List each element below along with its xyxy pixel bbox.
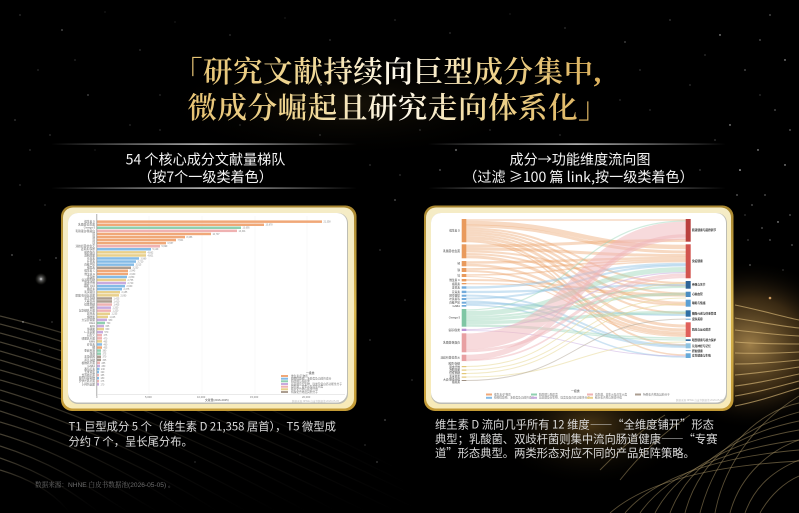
bar values: 10,797 (212, 234, 220, 236)
bar labels: 葡萄籽提取物 (79, 376, 95, 380)
source labels: 维生素 D (449, 228, 460, 232)
heading: right chart (428, 143, 726, 189)
bar values: 6,557 (168, 243, 174, 245)
source labels: 白藜芦醇 (449, 300, 460, 304)
bar labels: 低聚果糖 (84, 302, 95, 306)
bar labels: 镁 (92, 241, 95, 245)
legend: 一级类 (571, 388, 580, 393)
bar labels: 藻油 (90, 352, 95, 356)
bar labels: 菊粉 (90, 306, 95, 310)
source labels: 乳酸菌/益生菌 (443, 249, 460, 253)
bar values: 3,515 (136, 265, 142, 267)
flows: amino acids (466, 272, 686, 356)
bar values: 460 (104, 344, 108, 346)
source labels: 大麦/膳食纤维 (443, 378, 460, 382)
bar values: 1,235 (112, 314, 118, 316)
bar labels: 大豆异黄酮 (82, 318, 95, 322)
bar values: 375 (102, 354, 107, 356)
function labels (692, 228, 716, 358)
bar values: 3,720 (138, 262, 144, 264)
legend: 碳水化合物与膳食纤维 (595, 396, 622, 400)
legend: 植物提取物、多酚类及功能性成分 (494, 396, 535, 400)
bar labels: 番茄红素 (84, 367, 95, 371)
bar values: 570 (104, 332, 109, 334)
legend: 氨基酸及衍生物、肽类及蛋白质功能性分子 (291, 382, 342, 386)
source labels: 钙 (457, 262, 460, 266)
bar labels: 铁 (92, 235, 95, 239)
bar labels: 维生素 E (84, 272, 95, 276)
heading: right chart: 成分→功能维度流向图 (510, 150, 650, 170)
bar labels: 牛磺酸 (87, 327, 95, 331)
source footnote: 数据来源：NHNE 白皮书数据池(2026-05-05) 。 (35, 480, 175, 489)
bar values: 2,930 (130, 274, 136, 276)
bar values: 4,601 (148, 255, 154, 257)
text block: left takeaway: T1 巨型成分 5 个（维生素 D 21,358 居首），T5 微型成 (68, 418, 336, 434)
bar values: 185 (100, 375, 105, 377)
bar values: 665 (106, 326, 110, 328)
function labels: 肝脏健康 (692, 349, 703, 353)
source labels: 氨基/肽类 (448, 328, 460, 332)
text block: right takeaway: 道”形态典型。两类形态对应不同的产品矩阵策略。 (435, 445, 695, 461)
title: 微成分崛起且研究走向体系化」 (188, 92, 608, 125)
bar values: 240 (101, 369, 106, 371)
bar labels: 硒 (92, 346, 95, 350)
source labels: 低聚果糖 (449, 371, 460, 375)
bar labels: 姜黄素/多酚 (81, 247, 95, 251)
bar values: 2,090 (120, 295, 127, 297)
function labels: 睡眠与情绪 (692, 301, 706, 305)
bar values: 175 (100, 381, 105, 383)
bar values: 180 (100, 378, 105, 380)
bar labels: 亚麻籽油 (84, 348, 95, 352)
bar labels: DHA (89, 321, 95, 325)
bar values: 1,425 (114, 298, 120, 300)
bar labels: 罗伊氏乳杆菌 (79, 379, 95, 383)
bar labels: 锌 (92, 238, 95, 242)
source labels: 锌 (457, 274, 460, 278)
axes: 5,000 (145, 395, 152, 399)
bar values: 1,320 (112, 311, 119, 313)
bar values: 285 (102, 363, 106, 365)
bar labels: 透明质酸 (84, 253, 95, 257)
bar labels: 肌酸/支链氨基酸 (75, 293, 95, 297)
bar values: 280 (102, 366, 106, 368)
heading: left chart: 54 个核心成分文献量梯队 (126, 150, 285, 170)
bar labels: 钙 (92, 232, 95, 236)
bar values: 1,045 (110, 317, 116, 319)
bar labels: 白藜芦醇 (84, 263, 95, 267)
bar labels (75, 220, 96, 386)
axes: 0 (96, 395, 98, 399)
bar labels: 槲皮素 (87, 287, 95, 291)
bar labels: 黄芪多糖 (84, 358, 95, 362)
source labels: 叶黄素等 (449, 297, 460, 301)
bar labels: 乳酸菌/益生菌 (78, 223, 95, 227)
bar labels: 乳清蛋白 (84, 290, 95, 294)
bar values: 760 (106, 323, 111, 325)
bar labels: 维生素 D (84, 220, 95, 224)
bar values: 455 (104, 348, 108, 350)
source labels: 褪黑素 (452, 380, 460, 384)
flows: plant extracts (466, 264, 686, 357)
source labels: 乳酸菌/酪蛋白 (443, 340, 460, 344)
function labels: 认知神经与记忆 (692, 344, 711, 348)
text block: right takeaway: 典型；乳酸菌、双歧杆菌则集中流向肠道健康——“专赛 (435, 431, 717, 447)
source labels: 膳食纤维 (449, 365, 460, 369)
bar labels: 麦角硫因 (84, 355, 95, 359)
panel: sankey chart (424, 206, 734, 411)
function labels: 心脑血管 (692, 292, 703, 296)
flows: minerals and vitamins (466, 220, 686, 355)
function nodes (686, 219, 691, 358)
legend: 一级类 (306, 371, 315, 375)
bar labels: 5-羟色氨酸 (82, 382, 95, 386)
bar values (100, 222, 331, 386)
bar labels: L-茶氨酸 (85, 330, 95, 334)
bar labels: 烟酰胺 (87, 315, 95, 319)
bar values: 3,230 (132, 268, 139, 270)
source labels: 铁 (457, 268, 460, 272)
legend: 脂肪酸与脂质类 (539, 392, 558, 396)
legend: 氨基酸及衍生物、肽类及蛋白质功能性分子 (539, 396, 590, 400)
bar labels: 嗜酸乳杆菌 (82, 336, 95, 340)
bar labels: Omega-3 (84, 226, 96, 230)
bar values: 475 (104, 335, 108, 337)
axes (96, 214, 345, 402)
text block: left takeaway (68, 418, 336, 450)
bar labels: 长双歧杆菌 (82, 373, 95, 377)
source nodes (462, 219, 466, 381)
legend: 维生素/矿物质 (494, 392, 511, 396)
bar values: 2,740 (128, 283, 134, 285)
bar labels: NMN (89, 339, 95, 343)
function labels: 肠道健康与菌群调节 (692, 228, 716, 232)
bar labels: 软骨素 (87, 312, 95, 316)
bar labels: 人参皂苷 (84, 299, 95, 303)
source labels: 双歧杆菌/益生元 (440, 356, 460, 360)
bar values: 5,999 (162, 246, 168, 248)
bar labels: 花青素 (87, 256, 95, 260)
heading: left chart (51, 143, 357, 189)
legend: 益生菌、益生元及后生元类 (291, 385, 324, 389)
bar values: 660 (106, 329, 110, 331)
bar labels: 后生元 (87, 333, 95, 337)
bar values: 5,129 (152, 249, 159, 251)
bar labels: 膳食纤维 (84, 281, 95, 285)
bar labels: 茶多酚 (87, 275, 95, 279)
legend: 特殊化合物及其他分子 (291, 390, 318, 394)
title (173, 56, 608, 125)
legend (281, 371, 342, 394)
source labels (440, 228, 461, 384)
source labels: GABA (453, 304, 460, 308)
flows: probiotics (466, 230, 686, 360)
bar values: 2,660 (126, 286, 133, 288)
source labels: 酵母菌提 (449, 294, 460, 298)
flows: carbohydrates and others (466, 283, 686, 380)
bar values: 13,695 (242, 228, 250, 230)
bar values: 170 (100, 384, 105, 386)
function labels: 肌肉与运动营养 (692, 328, 711, 332)
bar labels: 灵芝多糖 (84, 296, 95, 300)
axes: 10,000 (197, 395, 206, 399)
bar values: 1,405 (114, 304, 120, 306)
bar labels: EPA (90, 324, 95, 328)
legend: 特殊化合物及其他分子 (643, 392, 670, 396)
bar values: 1,410 (114, 301, 120, 303)
source labels: 褪黑素 (452, 282, 460, 286)
bar values: 2,185 (122, 292, 128, 294)
panel: ingredient ranking chart (61, 206, 356, 411)
legend: 植物提取物、多酚类及功能性成分 (291, 377, 332, 381)
source labels: 姜黄素 (452, 286, 460, 290)
bar labels: 辅酶 Q10 (84, 284, 96, 288)
bar values: 2,850 (128, 277, 135, 279)
function labels: 免疫健康 (692, 259, 703, 263)
legend: 维生素/矿物质 (291, 374, 308, 378)
source note: 数据来源 NHNE 白皮书数据池 2026-05-05 (292, 399, 340, 403)
legend: 益生菌、益生元及后生元类 (595, 392, 628, 396)
axes: 文献量(2016-2025) (205, 398, 229, 402)
legend (486, 388, 670, 400)
bar values: 470 (104, 338, 108, 340)
function labels: 眼部健康与视力保护 (692, 338, 716, 342)
bar values: 13,301 (238, 231, 246, 233)
source labels: 透明质酸 (449, 368, 460, 372)
axes: 15,000 (250, 395, 259, 399)
heading: right chart: （过滤 ≥100 篇 link,按一级类着色） (463, 167, 694, 187)
function labels: 糖脂代谢与体重管理 (692, 312, 716, 316)
bar labels: GABA (88, 364, 95, 368)
bar labels: 双歧杆菌/益生元 (75, 244, 95, 248)
bar values: 4,662 (148, 252, 154, 254)
source labels: 胶原/多糖 (448, 362, 460, 366)
legend: 碳水化合物与膳食纤维 (291, 387, 318, 391)
legend: 脂肪酸与脂质类 (291, 379, 310, 383)
bar labels: 维生素 C (84, 269, 95, 273)
flows: fatty acids (466, 221, 686, 340)
function labels: 皮肤美容 (692, 317, 703, 321)
bar values: 950 (108, 320, 113, 322)
bar values: 21,358 (324, 222, 331, 224)
function labels: 骨骼与关节 (692, 282, 706, 286)
bar labels: 虾青素 (87, 342, 95, 346)
heading: left chart: （按7个一级类着色） (138, 167, 273, 187)
bar values: 370 (102, 357, 107, 359)
bar labels: 叶黄素 (87, 260, 95, 264)
axes: 20,000 (302, 395, 311, 399)
bar labels: 胶原蛋白 (84, 250, 95, 254)
source labels: 玉米黄质 (449, 374, 460, 378)
bar values: 2,375 (124, 289, 130, 291)
title: 「研究文献持续向巨型成分集中, (173, 56, 602, 89)
bar values: 365 (102, 360, 107, 362)
source labels: Omega-3 (449, 316, 461, 320)
bar labels: 氨基葡萄糖 (82, 278, 95, 282)
function labels: 女性健康与生殖 (692, 354, 711, 358)
bar series (97, 220, 322, 386)
text block: right takeaway: 维生素 D 流向几乎所有 12 维度——“全维度铺开”形态 (435, 416, 714, 432)
bar values: 2,945 (130, 271, 136, 273)
bar values: 380 (102, 350, 107, 352)
bar labels: 乳铁蛋白/酪蛋白 (75, 229, 95, 233)
bar values: 3,989 (140, 258, 147, 260)
source labels: 维生素 C (449, 278, 460, 282)
bar values: 7,501 (178, 240, 184, 242)
bar labels: 褪黑素 (87, 266, 95, 270)
bar labels: 植物乳杆菌 (82, 361, 95, 365)
bar values: 8,386 (186, 237, 193, 239)
source labels: 花青素 (452, 290, 460, 294)
text block: left takeaway: 分约 7 个，呈长尾分布。 (68, 434, 193, 450)
bar labels: 鼠李糖乳杆菌 (79, 309, 95, 313)
source note: 数据来源 NHNE 白皮书数据池 2026-05-05 (676, 398, 724, 402)
text block: right takeaway (435, 416, 717, 461)
bar values: 190 (100, 372, 105, 374)
bar values: 1,330 (112, 308, 119, 310)
bar values: 2,755 (128, 280, 134, 282)
bar values: 15,878 (266, 225, 273, 227)
bar values: 465 (104, 341, 108, 343)
bar labels: 玉米黄质 (84, 370, 95, 374)
